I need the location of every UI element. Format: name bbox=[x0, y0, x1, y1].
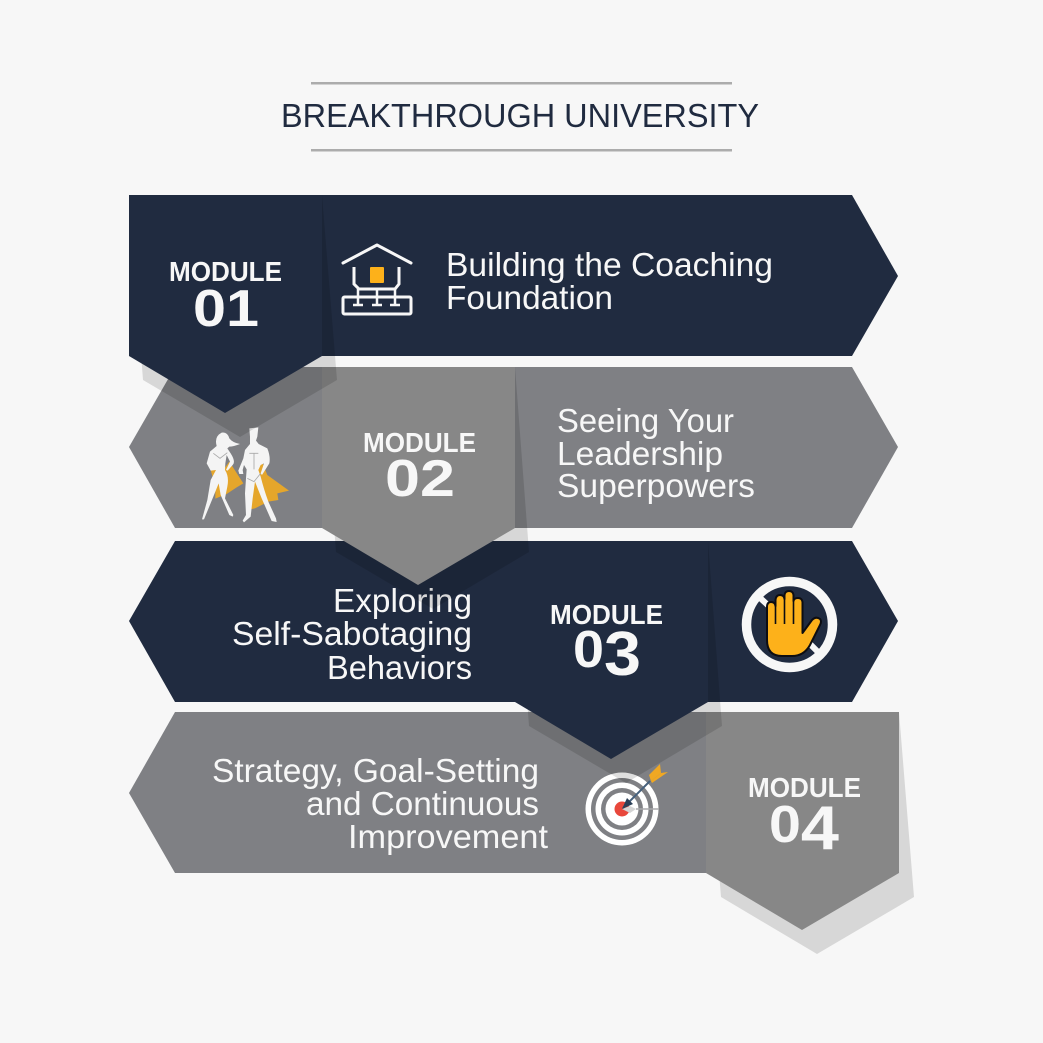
panel: module 02 bbox=[129, 367, 898, 609]
icon: target with arrow bbox=[586, 764, 668, 846]
panel: module 01 bbox=[129, 195, 898, 437]
module 02 label: 02 bbox=[385, 450, 455, 508]
module 02 label: MODULE bbox=[363, 427, 476, 458]
module 02 text bbox=[557, 402, 755, 504]
module 01 text: Building the Coaching bbox=[446, 246, 773, 283]
module 02 text: Leadership bbox=[557, 435, 723, 472]
module 03 text bbox=[232, 582, 472, 686]
module 04 text: and Continuous bbox=[306, 785, 539, 822]
module 03 text: Behaviors bbox=[327, 649, 472, 686]
module 03 text: Self-Sabotaging bbox=[232, 615, 472, 652]
icon: superheroes bbox=[202, 427, 289, 522]
heading: Breakthrough University: BREAKTHROUGH UNIVERSITY bbox=[281, 97, 759, 134]
icon: house on foundation bbox=[343, 245, 411, 314]
module 01 text bbox=[446, 246, 773, 316]
module 04 text: Improvement bbox=[348, 818, 548, 855]
module 04 label: MODULE bbox=[748, 772, 861, 803]
module 03 label: 0 bbox=[573, 621, 602, 679]
panel: module 03 bbox=[129, 541, 898, 783]
module 01 text: Foundation bbox=[446, 279, 613, 316]
module 04 label: 0 bbox=[769, 796, 798, 854]
panel: module 04 bbox=[129, 712, 914, 954]
module 02 label bbox=[363, 427, 476, 508]
module 03 label: MODULE bbox=[550, 599, 663, 630]
module 04 text: Strategy, Goal-Setting bbox=[212, 752, 539, 789]
module 03 label bbox=[550, 599, 663, 689]
module 02 text: Superpowers bbox=[557, 467, 755, 504]
module 03 text: Exploring bbox=[333, 582, 472, 619]
module 03 label: 3 bbox=[604, 620, 641, 689]
module 04 text bbox=[212, 752, 548, 855]
icon: stop hand bbox=[746, 582, 832, 668]
module 01 label: 01 bbox=[193, 280, 259, 338]
module 01 label: MODULE bbox=[169, 256, 282, 287]
module 01 label bbox=[169, 256, 282, 338]
module 02 text: Seeing Your bbox=[557, 402, 734, 439]
module 04 label bbox=[748, 772, 861, 863]
module 04 label: 4 bbox=[801, 794, 840, 863]
